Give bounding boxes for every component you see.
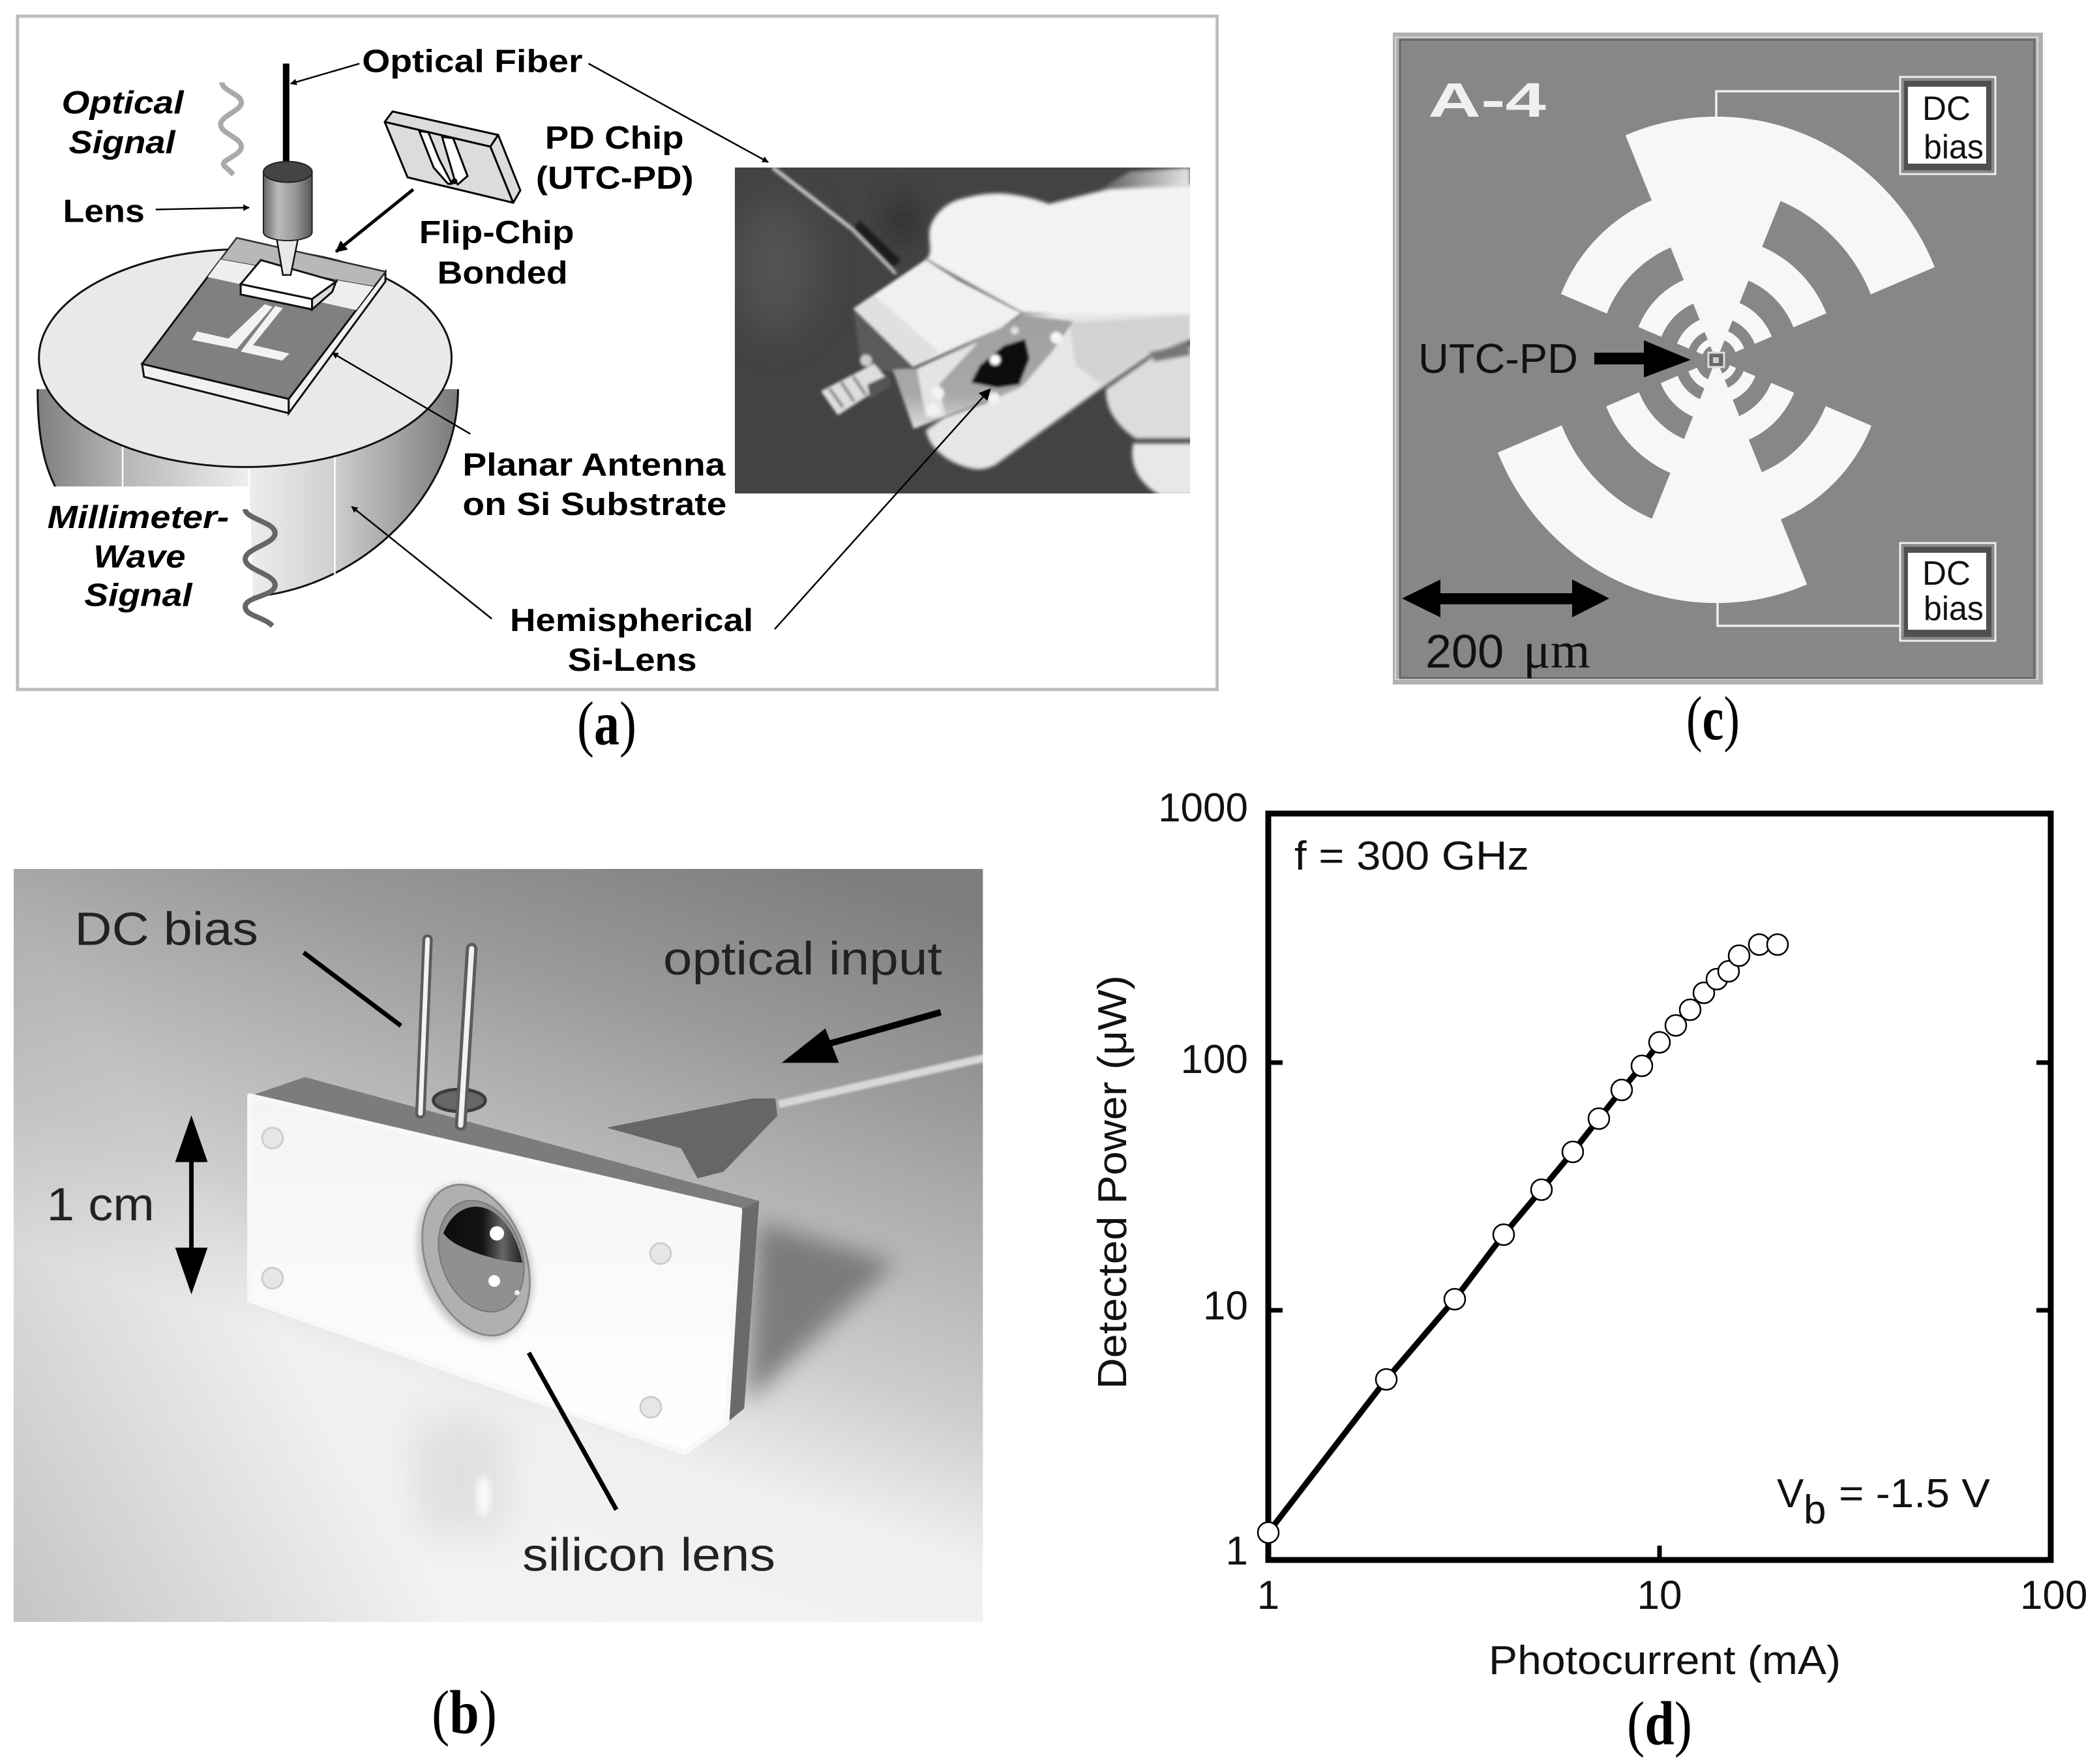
y axis title: Detected Power (μW) — [1090, 975, 1135, 1389]
upper log-periodic antenna arm — [1562, 117, 1934, 355]
axis ticks — [1268, 1063, 2051, 1560]
bias annotation: = -1.5 V — [1839, 1471, 1991, 1516]
caption (c): (c) — [1686, 684, 1740, 753]
caption (d): (d) — [1627, 1689, 1692, 1758]
labels: schematic callouts: Flip-Chip — [419, 215, 574, 250]
fingers and hand — [926, 184, 1193, 495]
planar antenna substrate — [142, 238, 385, 413]
label: silicon lens: silicon lens — [522, 1529, 775, 1581]
arrow: optical input — [782, 1012, 941, 1063]
labels: schematic callouts: Planar Antenna — [462, 447, 726, 482]
DC pins — [421, 939, 485, 1125]
caption (a): (a) — [577, 689, 636, 758]
UTC-PD device at centre — [1708, 353, 1724, 367]
y axis numbers: 10 — [1203, 1284, 1248, 1329]
labels: schematic callouts: Lens — [63, 194, 145, 229]
labels: schematic callouts: Optical — [62, 85, 185, 121]
photo: packaged module in hand — [735, 168, 1193, 495]
labels: schematic callouts: Signal — [68, 125, 176, 160]
labels: schematic callouts — [48, 44, 753, 678]
panel d: detected power chart — [1090, 786, 2087, 1683]
y axis numbers: 100 — [1181, 1037, 1248, 1082]
panel c: chip micrograph — [1393, 33, 2043, 684]
DC bias pad top: DC — [1922, 90, 1971, 128]
bias annotation — [1777, 1471, 1991, 1533]
labels: schematic callouts: Si-Lens — [568, 643, 697, 678]
module in photo — [773, 168, 1073, 429]
labels: schematic callouts: Wave — [93, 540, 186, 575]
DC bias pad bottom: bias — [1924, 590, 1984, 628]
silicon lens — [413, 1181, 536, 1343]
chip marking A-4: A-4 — [1428, 73, 1546, 127]
leader: DC bias — [304, 952, 401, 1026]
reflection on table — [415, 1419, 506, 1535]
leader: silicon lens — [529, 1353, 616, 1510]
panel b: module photograph — [14, 869, 986, 1622]
arrows and leader lines — [156, 64, 990, 629]
screw holes — [262, 1128, 671, 1418]
frequency annotation: f = 300 GHz — [1294, 834, 1529, 879]
labels: schematic callouts: Optical Fiber — [362, 44, 583, 79]
labels: schematic callouts: Hemispherical — [510, 603, 753, 638]
PD chip — [385, 111, 520, 203]
x axis numbers: 10 — [1637, 1573, 1682, 1618]
label: DC bias: DC bias — [74, 903, 258, 955]
panel a: module schematic — [18, 16, 1217, 690]
y axis numbers — [1158, 786, 1248, 1574]
fit line — [1268, 1042, 1660, 1533]
DC bias pad top — [1900, 77, 1995, 174]
photo backdrop shading — [737, 168, 1190, 332]
data points — [1258, 934, 1788, 1543]
scale bar arrow — [1402, 580, 1609, 617]
plot frame — [1268, 814, 2051, 1560]
lower log-periodic antenna arm — [1498, 365, 1871, 603]
y axis numbers: 1000 — [1158, 786, 1248, 831]
caption (b): (b) — [432, 1678, 497, 1747]
fiber input — [606, 1057, 986, 1178]
label: optical input: optical input — [663, 933, 942, 985]
x axis title: Photocurrent (mA) — [1489, 1638, 1841, 1683]
labels: schematic callouts: Bonded — [438, 256, 568, 291]
flip-chip bonded PD on substrate — [241, 260, 336, 310]
labels: schematic callouts: Millimeter- — [48, 500, 229, 535]
icon: optical signal wave — [220, 82, 241, 175]
arrow: 1 cm scale — [175, 1115, 207, 1295]
label: 1 cm: 1 cm — [47, 1179, 155, 1231]
hemispherical Si lens body — [38, 249, 458, 596]
bias annotation: V — [1777, 1471, 1804, 1516]
x axis numbers: 1 — [1257, 1573, 1279, 1618]
labels: schematic callouts: (UTC-PD) — [536, 161, 694, 196]
labels: schematic callouts: on Si Substrate — [462, 487, 726, 522]
icon: millimeter-wave signal — [245, 509, 275, 626]
y axis numbers: 1 — [1226, 1529, 1248, 1574]
module block — [250, 1077, 759, 1452]
DC bias pad bottom: DC — [1922, 555, 1971, 593]
block shadow — [746, 1222, 895, 1403]
arrow to UTC-PD — [1594, 340, 1691, 377]
DC bias pad bottom — [1900, 543, 1995, 641]
DC bias pad top: bias — [1924, 128, 1984, 166]
UTC-PD label: UTC-PD — [1418, 335, 1578, 382]
labels: schematic callouts: Signal — [84, 578, 193, 613]
bias annotation: b — [1804, 1488, 1826, 1533]
scale bar label: 200 — [1425, 626, 1504, 678]
x axis numbers: 100 — [2020, 1573, 2087, 1618]
x axis numbers — [1257, 1573, 2087, 1618]
bias wires — [1716, 91, 1900, 626]
labels: schematic callouts: PD Chip — [545, 121, 684, 156]
scale bar label: μm — [1523, 622, 1590, 679]
optical fiber — [283, 64, 290, 165]
lens assembly — [263, 162, 312, 275]
